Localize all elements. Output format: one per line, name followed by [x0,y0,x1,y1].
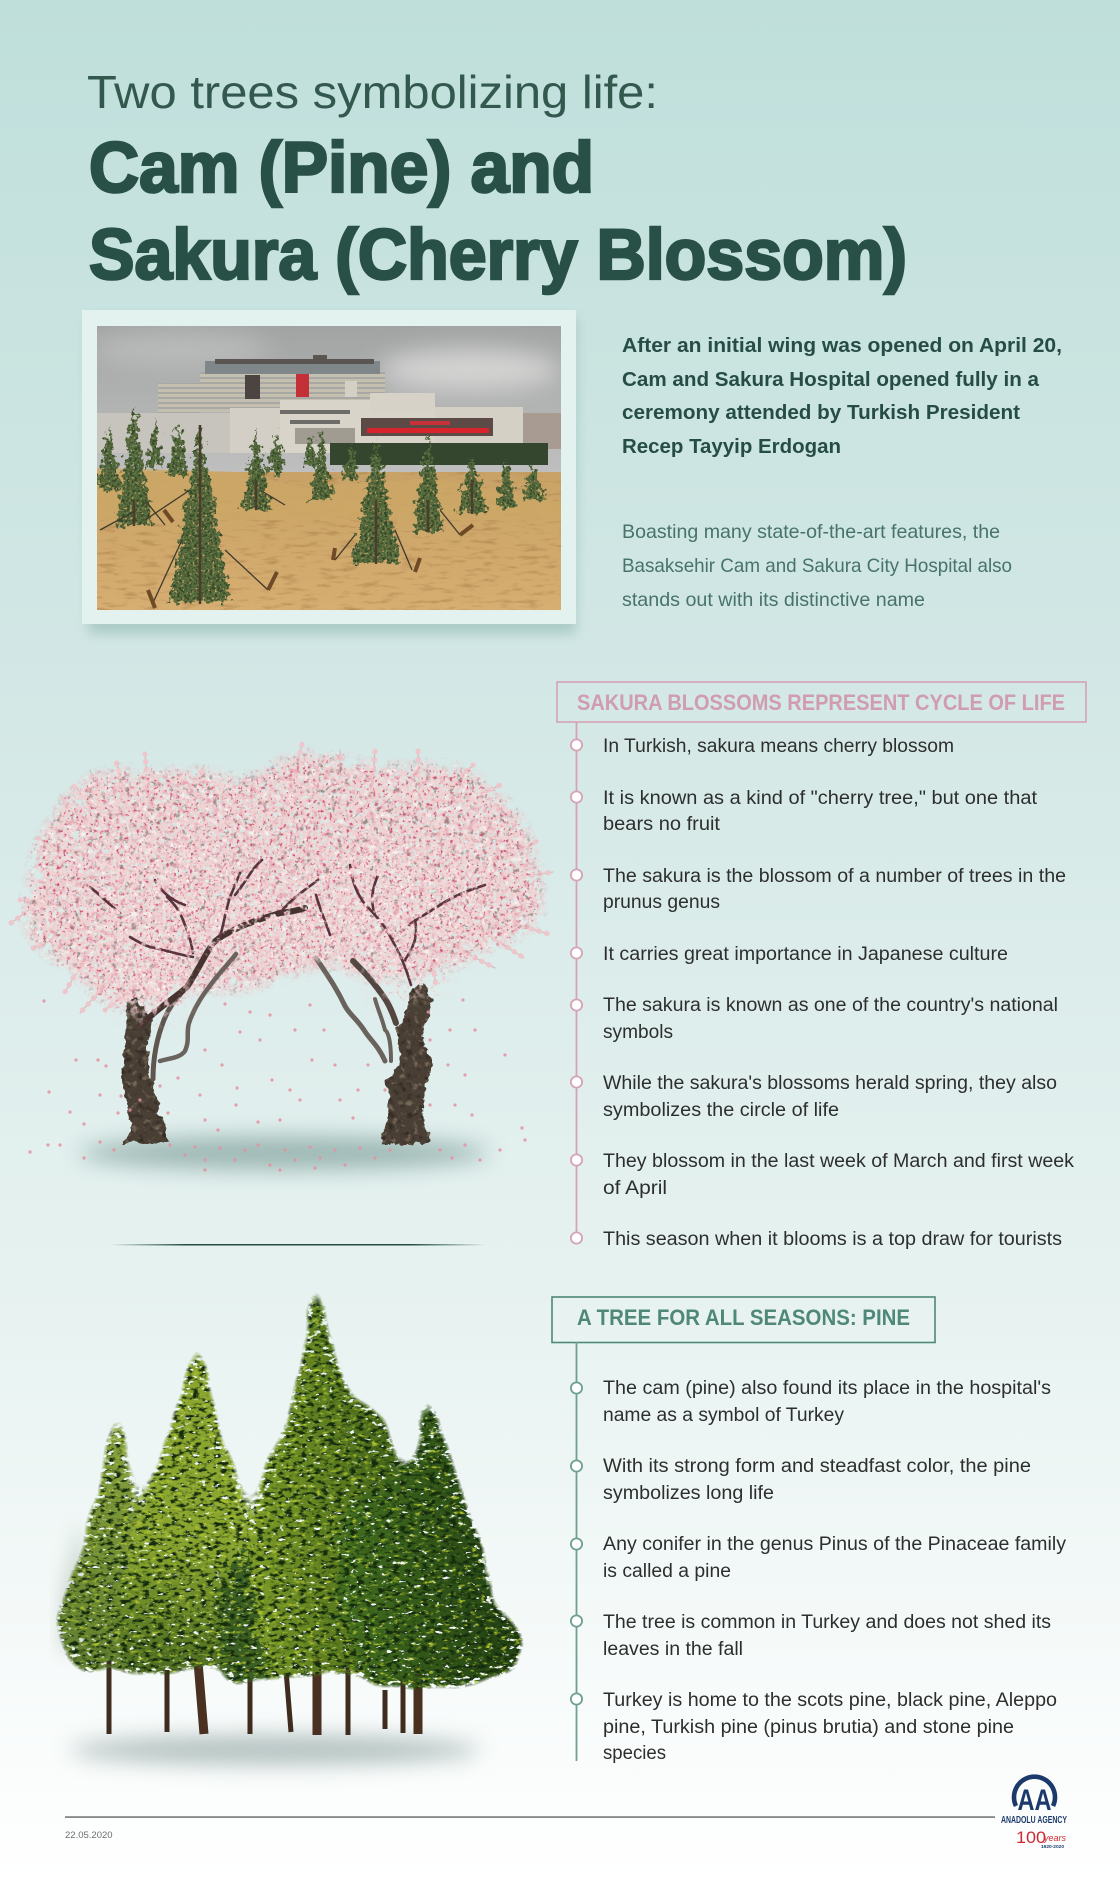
list text [603,736,1075,1250]
list text: symbolizes long life [603,1483,774,1504]
intro bold text [622,334,1062,458]
list text [603,1378,1067,1764]
ground shadow [79,1136,489,1170]
list text: The cam (pine) also found its place in the hospital's [603,1378,1051,1399]
list text: It is known as a kind of "cherry tree," but one that [603,788,1038,809]
title: Sakura (Cherry Blossom) [89,216,907,295]
intro paragraph: Basaksehir Cam and Sakura City Hospital also [622,555,1012,577]
foliage [54,1250,528,1690]
list text: The sakura is known as one of the country's national [603,995,1058,1016]
list text: The tree is common in Turkey and does not shed its [603,1612,1051,1633]
intro bold text: Cam and Sakura Hospital opened fully in a [622,368,1040,391]
title [87,66,907,295]
logo: Anadolu Agency: years [1043,1833,1066,1843]
list text: pine, Turkish pine (pinus brutia) and stone pine [603,1717,1014,1738]
list text: species [603,1743,666,1764]
list text: They blossom in the last week of March and first week [603,1151,1075,1172]
footer rule [65,1816,995,1818]
title: Two trees symbolizing life: [87,66,658,118]
list text: of April [603,1178,667,1199]
intro paragraph: stands out with its distinctive name [622,589,925,611]
divider [110,1244,486,1246]
list text: It carries great importance in Japanese culture [603,944,1008,965]
bullets [571,739,582,1244]
illustration: cherry trees [11,744,553,1170]
list text: Turkey is home to the scots pine, black pine, Aleppo [603,1690,1057,1711]
list text: The sakura is the blossom of a number of trees in the [603,866,1066,887]
panel: sakura heading: SAKURA BLOSSOMS REPRESENT CYCLE OF LIFE [577,690,1065,715]
list text: Any conifer in the genus Pinus of the Pinaceae family [603,1534,1067,1555]
logo: Anadolu Agency: 100 [1016,1828,1046,1847]
title: Cam (Pine) and [89,129,594,208]
bullets [571,1382,582,1705]
ground shadow [70,1735,480,1765]
panel: pine heading [552,1297,935,1342]
panel: sakura heading [557,682,1086,722]
branches [90,860,485,1079]
list text: name as a symbol of Turkey [603,1405,844,1426]
trunks [109,1640,403,1735]
list text: symbolizes the circle of life [603,1100,839,1121]
list text: While the sakura's blossoms herald spring, they also [603,1073,1057,1094]
list text: is called a pine [603,1561,731,1582]
trunks [122,982,433,1143]
falling petals [30,1000,525,1170]
illustration: pine trees [54,1250,528,1765]
blossom overlay on branches [85,838,495,1017]
photo: hospital and young pines [82,310,576,634]
list text: leaves in the fall [603,1639,743,1660]
list text: This season when it blooms is a top draw for tourists [603,1229,1062,1250]
logo: Anadolu Agency [1001,1777,1067,1849]
list text: symbols [603,1022,673,1043]
date: 22.05.2020 [65,1830,113,1841]
intro bold text: After an initial wing was opened on April 20, [622,334,1062,357]
blossom crown [25,756,542,1007]
intro paragraph: Boasting many state-of-the-art features, the [622,521,1000,543]
list text: prunus genus [603,892,720,913]
logo: Anadolu Agency: 1920-2020 [1041,1844,1064,1849]
panel: pine list [571,1342,1067,1764]
list text: bears no fruit [603,814,721,835]
faded far tree [60,1520,95,1650]
panel: sakura list [571,722,1075,1250]
outer twigs with blossoms [11,744,553,1013]
logo: Anadolu Agency: ANADOLU AGENCY [1001,1814,1067,1826]
list text: In Turkish, sakura means cherry blossom [603,736,954,757]
list text: With its strong form and steadfast color, the pine [603,1456,1031,1477]
intro paragraph [622,521,1012,611]
intro bold text: Recep Tayyip Erdogan [622,435,841,458]
intro bold text: ceremony attended by Turkish President [622,401,1020,424]
panel: pine heading: A TREE FOR ALL SEASONS: PINE [577,1305,910,1330]
logo: Anadolu Agency: AA [1018,1784,1052,1817]
